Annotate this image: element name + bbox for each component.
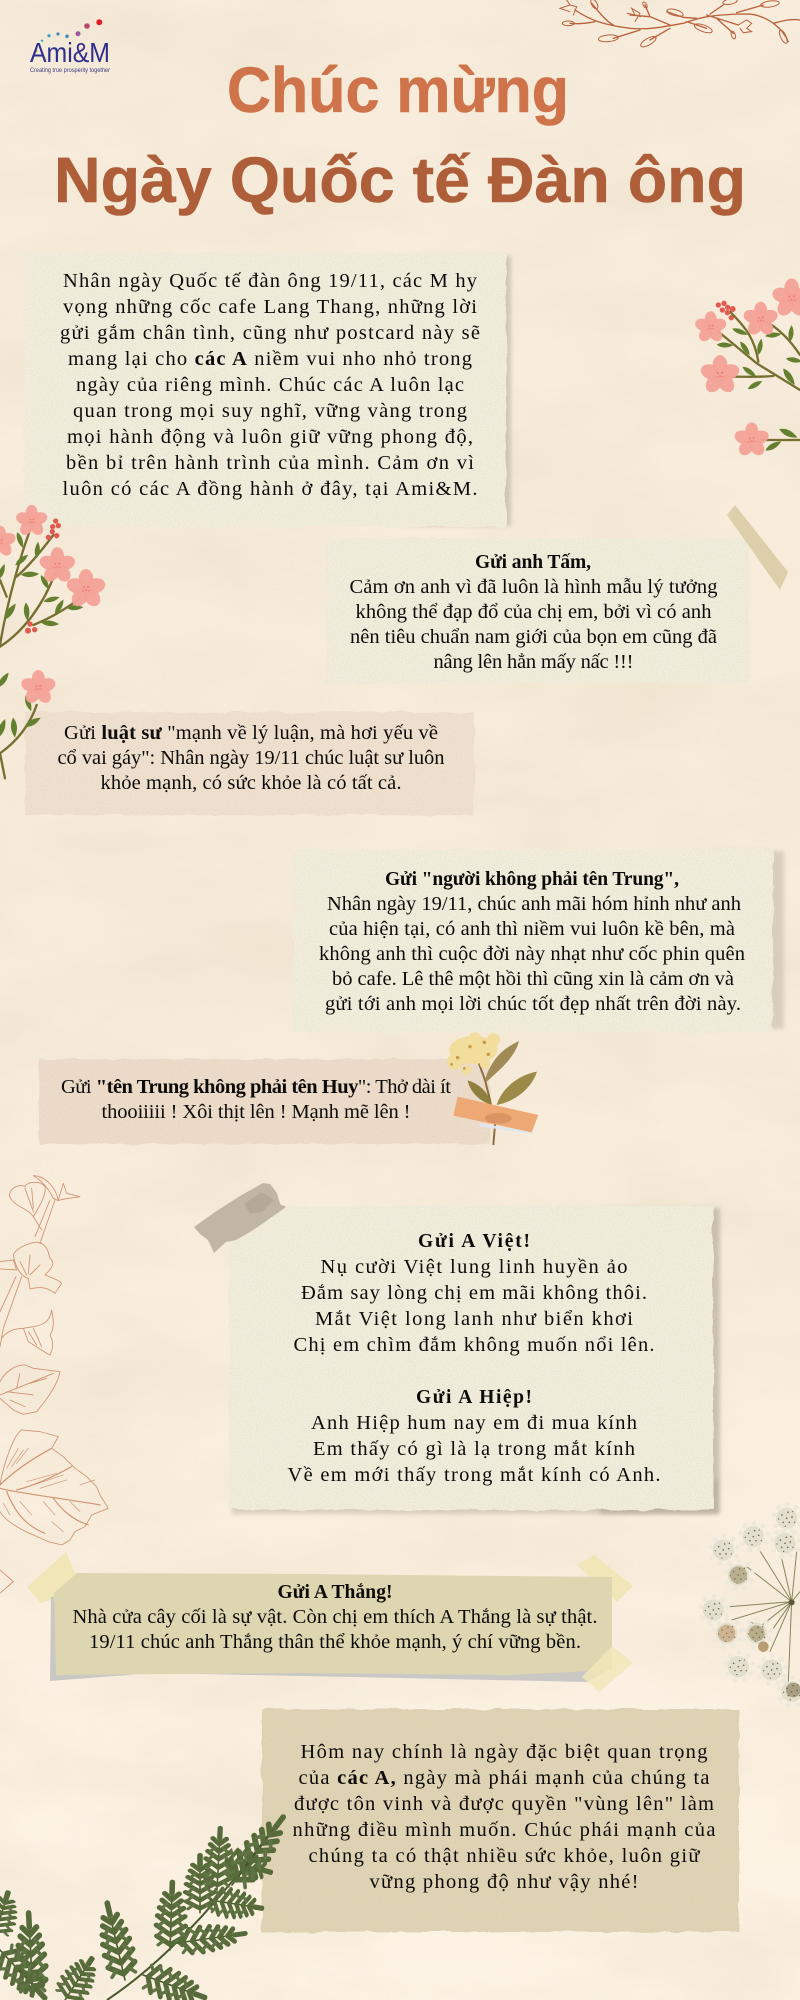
note text [72,1582,598,1653]
introduction text: vọng những cốc cafe Lang Thang, những lời [63,296,477,318]
closing text: vững phong độ như vậy nhé! [370,1871,638,1893]
tape: grey torn piece [194,1183,286,1253]
paper sheet [229,1206,713,1510]
note text: không anh thì cuộc đời này nhạt như cốc phin quên [319,943,745,965]
title: Ngày Quốc tế Đàn ông: Ngày Quốc tế Đàn ông [54,144,746,216]
tape: left yellow [27,1552,77,1603]
poem text: Gửi A Việt! [418,1231,530,1252]
note text: của hiện tại, có anh thì niềm vui luôn kề bên, mà [329,918,735,940]
panel: closing note [262,1709,739,1932]
note text: Gửi anh Tấm, [475,552,591,573]
introduction text: mọi hành động và luôn giữ vững phong độ, [67,426,473,448]
note text: 19/11 chúc anh Thắng thân thể khỏe mạnh, ý chí vững bền. [89,1631,581,1653]
introduction text: quan trong mọi suy nghĩ, vững vàng trong [73,400,467,422]
note text [58,722,444,794]
poem text [288,1231,660,1486]
introduction text: luôn có các A đồng hành ở đây, tại Ami&M. [62,478,478,500]
paper shadow [50,1597,605,1682]
icon: line-art botanical on the left [0,1176,108,1593]
note text: thooiiiii ! Xôi thịt lên ! Mạnh mẽ lên ! [102,1101,410,1123]
title: Chúc mừng: Chúc mừng [227,54,569,126]
paper sheet [24,253,506,527]
poem text: Nụ cười Việt lung linh huyền ảo [320,1256,628,1278]
introduction text: ngày của riêng mình. Chúc các A luôn lạc [76,374,464,396]
tape: top of Tấm note [727,505,788,590]
note text: khỏe mạnh, có sức khỏe là có tất cả. [100,772,402,794]
paper sheet [326,538,749,683]
note text: Nhân ngày 19/11, chúc anh mãi hóm hỉnh như anh [327,893,741,915]
closing text: chúng ta có thật nhiều sức khỏe, luôn giữ [308,1845,700,1867]
logo: Ami&M [30,19,111,74]
tape: bottom right yellow [582,1646,633,1692]
introduction text: bền bỉ trên hành trình của mình. Cảm ơn vì [66,452,474,474]
tape: top right yellow [577,1555,633,1602]
closing text [292,1741,716,1893]
note text: gửi tới anh mọi lời chúc tốt đẹp nhất trên đời này. [325,993,741,1015]
note text: Cảm ơn anh vì đã luôn là hình mẫu lý tưởng [350,576,718,598]
paper sheet [293,849,773,1032]
poem text: Anh Hiệp hum nay em đi mua kính [311,1412,637,1434]
note text: Gửi "tên Trung không phải tên Huy": Thở dài ít [61,1076,451,1098]
icon: pink flowers on the left [0,505,107,778]
icon: top right line-art branch [560,0,800,49]
panel: introduction note [24,253,511,527]
icon: fern at bottom left [0,1808,295,2000]
note text [61,1076,451,1123]
poem text: Về em mới thấy trong mắt kính có Anh. [288,1464,660,1486]
poem text: Gửi A Hiệp! [416,1387,532,1408]
icon: pink flowers on the right [694,278,800,458]
panel: note to anh Tấm [326,538,749,683]
icon: pressed yellow flower with orange tape [447,1032,538,1145]
poem text: Đắm say lòng chị em mãi không thôi. [301,1282,647,1304]
note text: cổ vai gáy": Nhân ngày 19/11 chúc luật sư luôn [58,747,444,769]
introduction text: gửi gắm chân tình, cũng như postcard này sẽ [60,322,480,344]
closing text: được tôn vinh và được quyền "vùng lên" làm [294,1793,714,1815]
note text: Gửi A Thắng! [278,1582,392,1603]
introduction text [60,270,480,500]
note text: không thể đạp đổ của chị em, bởi vì có anh [356,601,712,623]
note text: nâng lên hẳn mấy nấc !!! [434,651,634,673]
fabric sheet [25,712,474,815]
icon: dried umbel flower [698,1502,800,1708]
note text: nên tiêu chuẩn nam giới của bọn em cũng đã [350,626,717,648]
paper strip [54,1573,612,1675]
poem text: Chị em chìm đắm không muốn nổi lên. [294,1334,654,1356]
panel: poems to A Việt and A Hiệp [229,1206,720,1514]
fabric sheet [39,1059,490,1144]
panel: note to A Thắng [27,1552,633,1692]
kraft paper [262,1709,739,1932]
note text: Nhà cửa cây cối là sự vật. Còn chị em thích A Thắng là sự thật. [72,1606,598,1628]
closing text: Hôm nay chính là ngày đặc biệt quan trọng [300,1741,708,1763]
introduction text: mang lại cho các A niềm vui nho nhỏ trong [68,348,472,370]
closing text: những điều mình muốn. Chúc phái mạnh của [292,1819,716,1841]
note text: Gửi "người không phải tên Trung", [385,869,679,890]
note text: bỏ cafe. Lê thê một hồi thì cũng xin là cảm ơn và [332,968,734,990]
logo: Ami&M: Ami&M [30,37,110,68]
panel: note to "tên Trung không phải tên Huy" [39,1059,490,1144]
introduction text: Nhân ngày Quốc tế đàn ông 19/11, các M hy [63,270,478,292]
panel: note to lawyer [25,712,474,815]
closing text: của các A, ngày mà phái mạnh của chúng ta [298,1767,710,1789]
poem text: Mắt Việt long lanh như biển khơi [315,1308,633,1330]
logo: Ami&M: Creating true prosperity together [30,67,111,74]
note text: Gửi luật sư "mạnh về lý luận, mà hơi yếu về [64,722,438,744]
panel: note to "người không phải tên Trung" [293,849,784,1032]
note text [350,552,718,673]
note text [319,869,745,1015]
poem text: Em thấy có gì là lạ trong mắt kính [313,1438,635,1460]
